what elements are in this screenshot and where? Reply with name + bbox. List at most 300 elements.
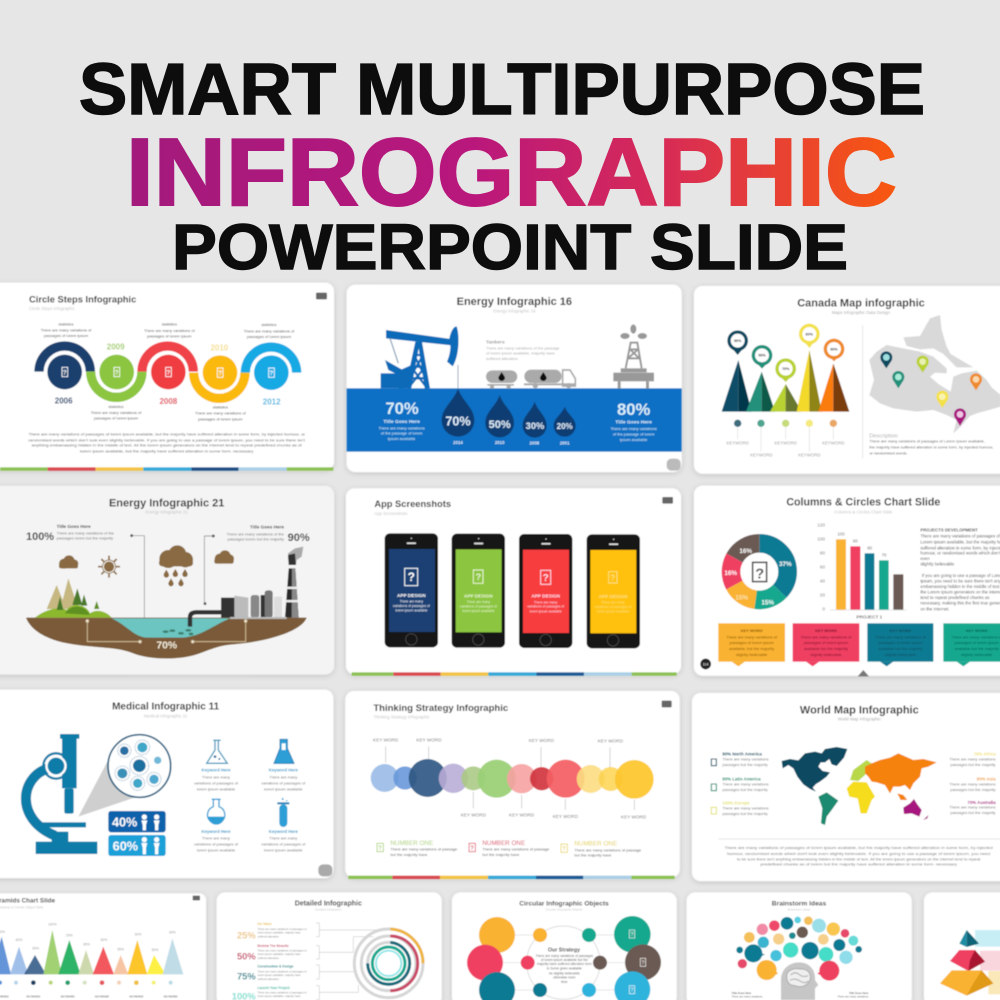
- steps chart: ?: [269, 370, 273, 377]
- right legend: passages but the majority: [950, 787, 996, 792]
- statistics captions: There are many variations of: [195, 410, 247, 415]
- drop values: 2001: [560, 440, 570, 445]
- panel: energy infographic 16: Energy Infographic 16: [493, 308, 536, 313]
- column chart: 100: [837, 532, 845, 537]
- keyword item 1: There are many: [202, 774, 230, 779]
- keyword box: green: KEY WORD: [966, 628, 988, 633]
- keyword box: yellow: There are many variations of: [726, 634, 778, 639]
- keyword item 3: variations of passages of: [194, 842, 239, 847]
- left callout: passages lorem but the majority: [57, 535, 113, 540]
- left legend: 90% Latin America: [722, 777, 761, 782]
- panel: detailed infographic: Detailed Infographic: [315, 907, 342, 911]
- description paragraph: [724, 845, 993, 867]
- heading: Columns & Circles Chart Slide: [786, 497, 940, 509]
- right legend: 70% Africa: [974, 752, 996, 757]
- phone: blue: APP DESIGN: [397, 593, 426, 598]
- icon: clouds and rain: [59, 545, 234, 586]
- keyword box: green: [943, 623, 1000, 666]
- panel: medical infographic 11: Medical Infographic 11: [144, 713, 188, 718]
- drop values: [445, 414, 573, 445]
- side captions: There are many variations: [837, 995, 869, 999]
- stat: 40%: 40%: [112, 816, 137, 830]
- panel: energy infographic 21: [0, 486, 334, 674]
- panel: brainstorm ideas: [687, 892, 912, 1000]
- keyword dots: [734, 420, 837, 452]
- blue band: [347, 388, 682, 452]
- phone: yellow: ?: [610, 572, 615, 582]
- view cone: [78, 761, 140, 817]
- key word labels: KEY WORD: [553, 814, 579, 819]
- right legend: There are many variations: [949, 781, 996, 786]
- number one: red: but the majority have: [482, 852, 520, 857]
- canada map: [869, 315, 1000, 433]
- left legend: passages but the majority: [722, 811, 768, 816]
- panel: energy infographic 16: [347, 285, 682, 472]
- side captions: [732, 991, 869, 999]
- legend keywords: KEYWORD: [129, 995, 143, 999]
- title line: powerpoint slide: POWERPOINT SLIDE: [172, 211, 848, 283]
- icon: pumpjack: [381, 326, 459, 388]
- statistics captions: [41, 321, 295, 421]
- keyword item 3: Keyword Here: [201, 829, 231, 834]
- strategy description: of lorem ipsum available but the: [541, 958, 588, 962]
- left stat: There are many variations: [379, 425, 425, 430]
- column chart: PROJECT 1: [856, 614, 883, 619]
- left callout: There are many variations of the: [57, 530, 115, 535]
- big circles right: ?: [631, 932, 634, 938]
- page badge: [662, 701, 672, 707]
- legend dots: [0, 980, 173, 985]
- keyword item 4: There are many: [269, 836, 297, 841]
- page badge: [667, 459, 681, 471]
- page badge: [316, 293, 327, 299]
- item titles: Launch Your Project: [257, 986, 290, 990]
- column chart: 120: [817, 523, 825, 528]
- idea bubbles: [736, 916, 862, 981]
- connectors: [316, 923, 390, 1000]
- right stat: [611, 400, 657, 442]
- side text: There are many variations of passages of: [920, 534, 1000, 539]
- left stat: Title Goes Here: [383, 419, 420, 425]
- drop chart: [442, 388, 576, 438]
- year labels: 2012: [263, 398, 281, 407]
- right legend: 80% Asia: [977, 777, 996, 782]
- panel: brainstorm ideas: Brainstorm Ideas: [788, 908, 811, 912]
- left stat: [379, 399, 425, 441]
- column chart: 0: [822, 607, 825, 612]
- pyramid chart: [0, 930, 183, 974]
- small circles: [521, 928, 607, 997]
- description text: the majority have suffered alteration in some form, by injected humour,: [869, 445, 994, 450]
- phone: red: lorem ipsum available: [530, 609, 562, 613]
- magnified view: [108, 735, 171, 797]
- icon: tankers: [486, 370, 576, 389]
- title line: infrographic: INFROGRAPHIC: [126, 119, 897, 226]
- statistics captions: passages of lorem ipsum: [247, 334, 292, 339]
- keyword box: pink: There are many variations of: [801, 634, 852, 639]
- pyramid chart: [722, 350, 849, 412]
- left legend: 80% North America: [722, 752, 762, 757]
- right legend: passages but the majority: [950, 810, 996, 815]
- key word labels: KEY WORD: [461, 813, 487, 818]
- strategy description: There are many variations of passages: [536, 954, 593, 958]
- keyword item 2: lorem ipsum available: [264, 786, 303, 791]
- percent list: 50%: [237, 952, 256, 962]
- number one: green: but the majority have: [390, 852, 428, 857]
- phone: green: lorem ipsum available: [462, 609, 495, 613]
- percent list: [232, 930, 256, 1000]
- year labels: 2009: [107, 343, 125, 352]
- keyword item 4: Keyword Here: [269, 829, 298, 834]
- description paragraph: randomised words which don't look even slightly believable. If you are going to use a passage of lorem ipsum, you need to be sure there isn't: [28, 437, 306, 442]
- leader lines: [130, 534, 214, 628]
- ring chart: [354, 929, 423, 998]
- key word labels: KEY WORD: [621, 814, 647, 819]
- water: [112, 618, 230, 638]
- legend keywords: KEYWORD: [164, 995, 178, 999]
- big circles right: ?: [642, 960, 645, 966]
- statistics captions: passages of lorem ipsum: [147, 334, 192, 339]
- steps chart: ?: [63, 369, 67, 376]
- chart pins: [727, 324, 844, 382]
- statistics captions: passages of lorem ipsum: [198, 416, 243, 421]
- left legend: passages but the majority: [722, 762, 768, 767]
- keyword item 1: lorem ipsum available: [197, 786, 236, 791]
- year labels: 2006: [55, 396, 73, 405]
- panel: medical infographic 11: [0, 690, 333, 878]
- side text: slightly believable: [920, 562, 955, 567]
- phone: red: variations of passages of: [527, 605, 564, 609]
- drop values: 50%: [489, 419, 511, 431]
- tankers text: of lorem ipsum available, majority have: [486, 351, 556, 356]
- strategy description: majority have suffered alteration form: [537, 962, 592, 966]
- left legend: [711, 752, 769, 816]
- item text: suffered alteration: [258, 977, 279, 981]
- number one: green: NUMBER ONE: [390, 840, 433, 847]
- page badge: [662, 497, 673, 504]
- right callout: passages lorem but the majority: [228, 536, 284, 541]
- layered pyramid: [940, 930, 993, 996]
- item text: lorem ipsum available, majority have: [258, 952, 301, 956]
- keyword box: teal: passages of lorem ipsum: [878, 640, 923, 645]
- panel: circular infographic objects: Circular Infographic Objects: [546, 908, 583, 912]
- panel: canada map infographic: Maps Infographic Data Design: [832, 310, 891, 315]
- title line: smart multipurpose: SMART MULTIPURPOSE: [79, 50, 925, 130]
- phone: green: APP DESIGN: [464, 593, 493, 598]
- heading: Thinking Strategy Infographic: [373, 703, 509, 714]
- page badge: 114: [703, 662, 709, 666]
- donut chart: 15%: [735, 595, 748, 602]
- left legend: 100% Europe: [722, 800, 750, 805]
- item titles: [257, 922, 293, 990]
- number one: red: [469, 840, 550, 857]
- year labels: 2010: [210, 343, 229, 352]
- item text: There are many variations of passages of: [258, 948, 307, 952]
- heading: Circle Steps Infographic: [29, 295, 136, 305]
- keyword item 4: [261, 798, 306, 853]
- strategy description: in Some given available: [547, 967, 582, 971]
- pyramid labels: [0, 923, 176, 952]
- keyword box: pink: passages of lorem ipsum: [804, 640, 849, 645]
- panel: app screenshots: App Screenshots: [374, 511, 407, 516]
- phone: red: APP DESIGN: [531, 594, 561, 599]
- donut chart: [724, 543, 792, 607]
- heading: Medical Infographic 11: [112, 702, 220, 713]
- right stat: 80%: [617, 400, 651, 419]
- keyword item 2: There are many: [269, 774, 297, 779]
- year labels: 2008: [159, 397, 178, 406]
- page badge: [193, 896, 200, 900]
- heading: World Map Infographic: [800, 704, 919, 716]
- panel: thinking strategy infographic: [345, 691, 680, 879]
- donut chart: 16%: [724, 570, 737, 577]
- item text: suffered alteration: [258, 956, 279, 960]
- keyword labels: KEYWORD: [726, 440, 749, 445]
- big circles right: [614, 916, 661, 1000]
- column chart: 80: [867, 546, 873, 551]
- right stat: ipsum available: [620, 437, 648, 442]
- legend keywords: KEYWORD: [61, 995, 75, 999]
- keyword box: teal: There are many variations of: [875, 634, 927, 639]
- icon: microscope: [26, 734, 97, 854]
- leader lines: [386, 746, 634, 810]
- donut chart: 16%: [739, 548, 752, 555]
- panel: columns and circles chart slide: Columns & Circles Chart Slide: [834, 509, 893, 514]
- statistics captions: statistics: [213, 404, 228, 409]
- statistics captions: passages of lorem ipsum: [44, 333, 89, 338]
- tankers text: Tankers: [486, 339, 505, 345]
- right callout: 90%: [288, 532, 310, 544]
- left stat: ipsum available: [388, 436, 416, 441]
- heading: Energy Infographic 21: [109, 498, 224, 510]
- item titles: Construction & Design: [257, 965, 293, 969]
- description text: [869, 434, 994, 456]
- panel: app screenshots: [346, 488, 681, 676]
- side captions: Title Goes Here: [732, 991, 752, 995]
- right stat: Title Goes Here: [615, 420, 652, 426]
- percent list: 25%: [237, 930, 256, 940]
- phone: red: ?: [543, 573, 549, 584]
- keyword item 1: Keyword Here: [201, 768, 231, 773]
- our strategy text: Our Strategy: [548, 948, 580, 954]
- description paragraph: There are many variations of passages of lorem ipsum available, but the majority have suffered alteration in some form, by injected humour, or: [28, 431, 306, 436]
- landscape ground: [26, 618, 307, 658]
- right stat: of the passage of lorem: [613, 431, 655, 436]
- tankers text: suffered alteration: [486, 356, 518, 361]
- panel: columns and circles chart slide: [694, 486, 1000, 676]
- item text: There are many variations of passages of: [258, 927, 307, 931]
- label bars: [975, 930, 1000, 994]
- side text: on the Internet.: [920, 606, 949, 611]
- keyword labels: KEYWORD: [750, 453, 773, 458]
- phone: red: There are many: [534, 600, 558, 604]
- keyword labels: KEYWORD: [774, 440, 797, 445]
- factory: [190, 547, 303, 627]
- pyramid labels: 80%: [101, 938, 107, 942]
- chart pins: 80%: [806, 332, 814, 336]
- drop values: 2010: [495, 440, 505, 445]
- keyword box: yellow: available, but the majority: [729, 646, 774, 651]
- panel: world map infographic: World Map Infographic: [838, 717, 882, 722]
- head with brain: [781, 962, 818, 1000]
- right stat: There are many variations: [611, 426, 657, 431]
- description text: or randomised words.: [869, 451, 908, 456]
- pyramid labels: 25%: [66, 933, 73, 937]
- statistics captions: statistics: [58, 321, 74, 326]
- big circles left: [467, 917, 515, 1000]
- keyword item 2: variations of passages of: [261, 780, 306, 785]
- panel: pyramid object: [924, 892, 1000, 1000]
- keyword box: green: passages of lorem ipsum: [955, 640, 999, 645]
- keyword labels: KEYWORD: [798, 453, 821, 458]
- number one: green: ?: [378, 846, 382, 852]
- panel: circular infographic objects: [452, 892, 677, 1000]
- item text: There are many variations of passages of: [258, 969, 307, 973]
- year labels: [55, 343, 281, 407]
- description paragraph: to be sure there isn't anything embarrassing hidden in the middle of text. All the lorem ipsum generators on the internet tend to repeat: [737, 856, 981, 861]
- key word labels: [373, 738, 647, 819]
- donut chart: 37%: [779, 561, 792, 568]
- statistics captions: statistics: [261, 322, 277, 327]
- steps chart: ?: [115, 369, 119, 376]
- heading: Brainstorm Ideas: [772, 900, 826, 907]
- donut chart: ?: [755, 566, 764, 582]
- number one: yellow: but the majority have: [574, 853, 612, 858]
- column chart: [817, 523, 907, 619]
- strategy description: be slightly believable: [549, 971, 580, 975]
- pyramid labels: 55%: [117, 947, 124, 951]
- right legend: 70% Australia: [967, 800, 996, 805]
- strategy description: time: [561, 980, 568, 984]
- strategy description: [536, 954, 593, 984]
- page badge: [318, 864, 332, 876]
- keyword item 3: lorem ipsum available: [197, 848, 236, 853]
- steps chart: [34, 341, 301, 403]
- phone: blue: There are many: [400, 600, 423, 604]
- left legend: There are many variations: [722, 805, 769, 810]
- phone: green: There are many: [467, 600, 490, 604]
- keyword item 4: lorem ipsum available: [264, 848, 303, 853]
- chart pins: 60%: [830, 347, 838, 351]
- left legend: There are many variations: [722, 781, 769, 786]
- column chart: 40: [820, 579, 825, 584]
- percent list: 75%: [237, 972, 256, 982]
- chart pins: 90%: [734, 339, 742, 343]
- side captions: There are many variations: [732, 995, 763, 999]
- left callout: Title Goes Here: [57, 524, 91, 529]
- panel: circle steps infographic: Circle Steps Infographic: [29, 306, 76, 311]
- item text: suffered alteration: [258, 935, 279, 939]
- phone: blue: [385, 533, 438, 647]
- statistics captions: There are many variations of: [244, 328, 295, 333]
- left callout: 100%: [26, 531, 54, 543]
- phone: yellow: [587, 534, 640, 648]
- page badge: [700, 659, 711, 669]
- pyramid labels: 100%: [48, 923, 57, 927]
- drop values: 30%: [526, 421, 545, 431]
- keyword item 1: variations of passages of: [194, 780, 239, 785]
- column chart: 80: [820, 551, 825, 556]
- title: [79, 50, 925, 283]
- key word labels: KEY WORD: [373, 738, 399, 743]
- center ring: [527, 926, 600, 999]
- legend keywords: KEYWORD: [95, 995, 109, 999]
- keyword item 3: [194, 799, 239, 853]
- drop values: 70%: [445, 414, 471, 428]
- heading: Detailed Infographic: [295, 900, 362, 907]
- keyword item 2: Keyword Here: [269, 768, 298, 773]
- mountains and trees: [35, 578, 112, 618]
- keyword labels: [726, 440, 845, 458]
- phone: yellow: variations of passages of: [595, 605, 631, 609]
- left callout: [26, 524, 115, 543]
- key word labels: KEY WORD: [509, 813, 535, 818]
- panel: circle steps infographic: [0, 283, 334, 471]
- statistics captions: passages of lorem ipsum: [94, 416, 139, 421]
- divider line: [718, 838, 1000, 840]
- phone: yellow: lorem ipsum available: [597, 610, 629, 614]
- item text: There are many variations of passages of: [258, 990, 307, 994]
- stat: 60%: 60%: [113, 839, 138, 853]
- overlapping circles chart: [371, 759, 654, 799]
- keyword item 1: [194, 740, 239, 791]
- right legend: There are many variations: [949, 756, 996, 761]
- key word labels: KEY WORD: [416, 738, 442, 743]
- side text: even: [920, 556, 930, 561]
- heading: Circular Infographic Objects: [519, 900, 609, 907]
- legend keywords: [0, 995, 178, 999]
- legend keywords: KEYWORD: [26, 995, 40, 999]
- steps chart: ?: [166, 369, 170, 376]
- key word labels: KEY WORD: [598, 739, 624, 744]
- number one: yellow: There are many variations of passage: [574, 847, 642, 852]
- keyword labels: KEYWORD: [822, 441, 845, 446]
- keyword box: pink: slightly believable: [810, 652, 842, 657]
- description paragraph: anything embarrassing hidden in the middle of text. All the lorem ipsum generators on the internet tend to repeat predefined chunks as of: [32, 443, 303, 448]
- keyword item 3: There are many: [202, 836, 230, 841]
- phone: blue: ?: [408, 570, 415, 584]
- strategy description: otherwise even: [553, 975, 576, 979]
- map pins: [880, 351, 982, 426]
- keyword item 4: variations of passages of: [261, 842, 306, 847]
- phone: yellow: There are many: [601, 601, 625, 605]
- heading: App Screenshots: [374, 499, 451, 509]
- panel: world map infographic: [692, 693, 1000, 881]
- heading: Canada Map infographic: [797, 298, 925, 310]
- column chart: 70: [882, 553, 887, 558]
- keyword box: pink: available but the majority: [804, 646, 848, 651]
- world map: [782, 747, 937, 825]
- column chart: 60: [820, 565, 825, 570]
- heading: Energy Infographic 16: [457, 296, 572, 308]
- statistics captions: statistics: [108, 404, 124, 409]
- phone: green: [452, 534, 505, 648]
- stat: 60%: [108, 835, 166, 856]
- connector lines: [503, 935, 626, 990]
- keyword box: pink: KEY WORD: [815, 628, 837, 633]
- column chart: 90: [853, 538, 858, 543]
- chart pins: 70%: [782, 367, 790, 371]
- keyword box: yellow: slightly believable: [736, 652, 768, 657]
- keyword box: yellow: KEY WORD: [741, 628, 763, 633]
- panel: pyramids chart slide: [0, 893, 206, 1000]
- item titles: On Value: [257, 922, 272, 926]
- right callout: [227, 525, 310, 544]
- sediment: [163, 629, 193, 635]
- percentage connector: [86, 620, 247, 643]
- description text: Description: [869, 434, 898, 440]
- phone: red: [519, 534, 572, 648]
